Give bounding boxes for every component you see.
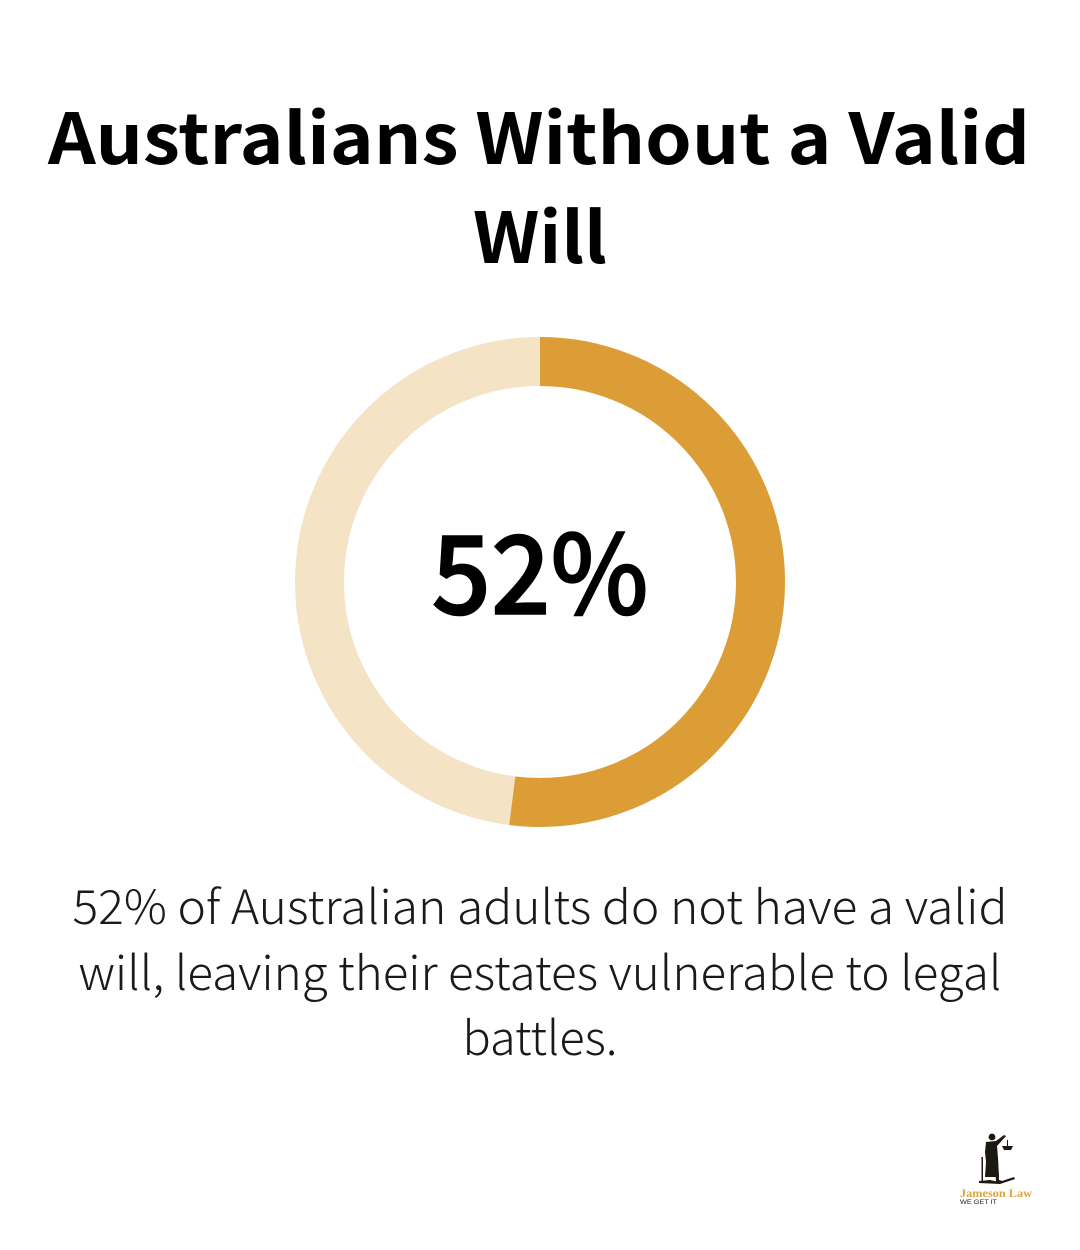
description text: 52% of Australian adults do not have a valid <box>72 869 1008 938</box>
description text <box>72 869 1008 1069</box>
logo name: Jameson Law <box>960 1188 1033 1200</box>
donut chart: 52% <box>320 362 760 802</box>
icon: lady justice <box>979 1134 1015 1184</box>
title: Will <box>473 183 607 284</box>
title <box>47 84 1030 284</box>
logo tagline: WE GET IT <box>960 1199 997 1206</box>
description text: battles. <box>462 1000 618 1069</box>
logo: Jameson Law <box>960 1134 1033 1206</box>
donut centre value: 52% <box>432 489 648 646</box>
donut value arc <box>320 362 760 802</box>
donut track <box>320 362 760 802</box>
description text: will, leaving their estates vulnerable to legal <box>78 935 1002 1004</box>
title: Australians Without a Valid <box>47 84 1030 185</box>
